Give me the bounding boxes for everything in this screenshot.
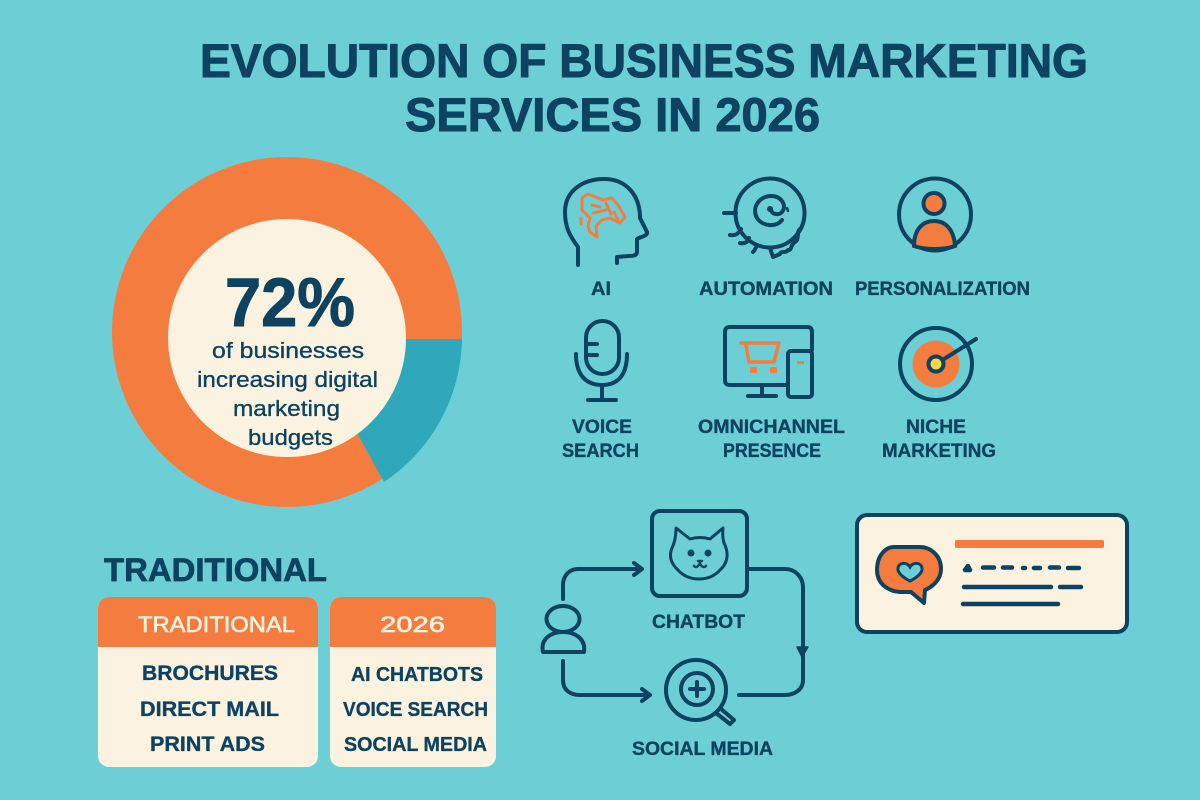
arrow: user to social media — [563, 661, 650, 701]
icon: chat bubble with heart — [877, 547, 941, 603]
review text lines — [963, 566, 1081, 604]
label: personalization: PERSONALIZATION — [855, 279, 1030, 300]
panel: 2026 table: SOCIAL MEDIA — [344, 733, 487, 756]
label: niche marketing: NICHE — [906, 417, 966, 438]
icon: magnifier — [666, 660, 734, 724]
heading: traditional: TRADITIONAL — [104, 552, 327, 588]
label: niche marketing — [882, 417, 996, 462]
icon: omnichannel devices — [725, 327, 812, 397]
label: niche marketing: MARKETING — [882, 441, 996, 462]
donut caption: of businesses — [212, 338, 364, 363]
arrow: chatbot to social media — [739, 569, 803, 695]
label: voice search: VOICE — [572, 417, 632, 438]
panel: 2026 table: VOICE SEARCH — [343, 698, 488, 721]
icon: AI head — [565, 179, 647, 265]
panel: traditional table — [98, 597, 318, 767]
donut caption: budgets — [248, 425, 333, 450]
panel: 2026 table — [330, 597, 496, 767]
arrowhead — [797, 647, 808, 657]
label: AI: AI — [591, 279, 611, 300]
icon: niche target — [900, 328, 976, 400]
donut caption — [197, 338, 378, 450]
donut chart: 72% — [112, 157, 462, 507]
label: voice search: SEARCH — [562, 441, 639, 462]
panel: traditional table: TRADITIONAL — [138, 612, 295, 637]
title: SERVICES IN 2026 — [405, 88, 820, 141]
icon: microphone — [576, 321, 627, 400]
title — [200, 34, 1088, 141]
panel: 2026 table: 2026 — [380, 612, 445, 637]
label: omnichannel presence — [698, 417, 845, 462]
label: omnichannel presence: PRESENCE — [723, 441, 821, 462]
flow diagram: chatbot and social media — [543, 511, 808, 760]
panel: traditional table: BROCHURES — [142, 661, 278, 685]
panel: testimonial card — [857, 515, 1127, 632]
label: voice search — [562, 417, 639, 462]
label: social media: SOCIAL MEDIA — [632, 738, 773, 760]
label: chatbot: CHATBOT — [652, 611, 745, 633]
donut caption: marketing — [233, 396, 340, 421]
panel: 2026 table: AI CHATBOTS — [351, 663, 483, 686]
icon: chatbot cat — [652, 511, 747, 596]
review heading bar — [955, 540, 1104, 548]
arrow: user to chatbot — [563, 563, 642, 599]
label: automation: AUTOMATION — [699, 279, 833, 300]
panel: traditional table: PRINT ADS — [150, 732, 265, 756]
panel: traditional table: DIRECT MAIL — [140, 697, 279, 721]
title: EVOLUTION OF BUSINESS MARKETING — [200, 34, 1088, 87]
icon: user — [543, 606, 584, 652]
icon: personalization — [899, 178, 971, 250]
donut value: 72% — [225, 264, 355, 341]
label: omnichannel presence: OMNICHANNEL — [698, 417, 845, 438]
donut caption: increasing digital — [197, 367, 378, 392]
icon: automation gear — [724, 178, 804, 257]
